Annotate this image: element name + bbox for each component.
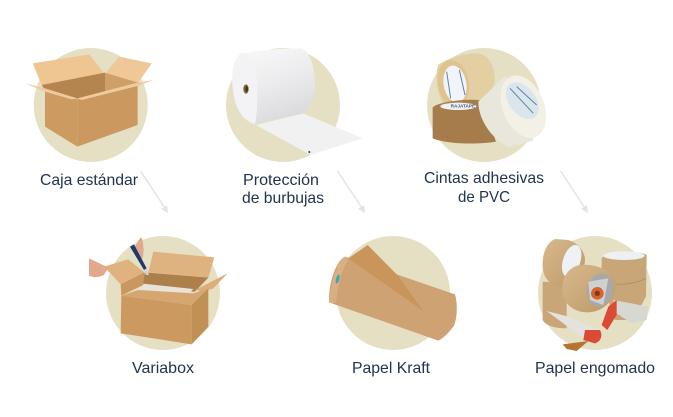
label: Cintas adhesivas	[424, 170, 544, 187]
icon: open cardboard box	[25, 54, 153, 147]
label: Protección	[243, 172, 319, 189]
item: Protección de burbujas: de burbujas	[242, 190, 324, 207]
arrow 1	[140, 171, 168, 213]
circle background	[106, 236, 220, 350]
circle background	[34, 48, 148, 162]
item: Papel Kraft	[329, 236, 457, 377]
icon: variable height box with cutter	[89, 237, 228, 344]
circle background	[226, 48, 340, 162]
icon: PVC tape rolls: RAJATAPE	[451, 104, 475, 109]
item: Variabox	[89, 236, 228, 377]
item: Papel engomado	[535, 236, 655, 377]
label: Caja estándar	[40, 172, 138, 189]
circle background	[538, 236, 652, 350]
icon: bubble wrap roll	[232, 48, 363, 155]
item: Cintas adhesivas de PVC: de PVC	[458, 189, 510, 206]
label: Variabox	[132, 360, 194, 377]
circle background	[427, 48, 541, 162]
arrow 2	[338, 171, 365, 213]
arrow 3	[560, 171, 588, 213]
icon: kraft paper roll	[329, 245, 457, 341]
item: Caja estándar	[25, 48, 153, 189]
icon: gummed paper tapes and dispenser	[543, 239, 648, 351]
item: Protección de burbujas	[226, 48, 363, 207]
label: Papel engomado	[535, 360, 655, 377]
label: Papel Kraft	[352, 360, 431, 377]
icon: PVC tape rolls	[433, 53, 555, 147]
item: Cintas adhesivas de PVC	[424, 48, 555, 206]
circle background	[336, 236, 450, 350]
